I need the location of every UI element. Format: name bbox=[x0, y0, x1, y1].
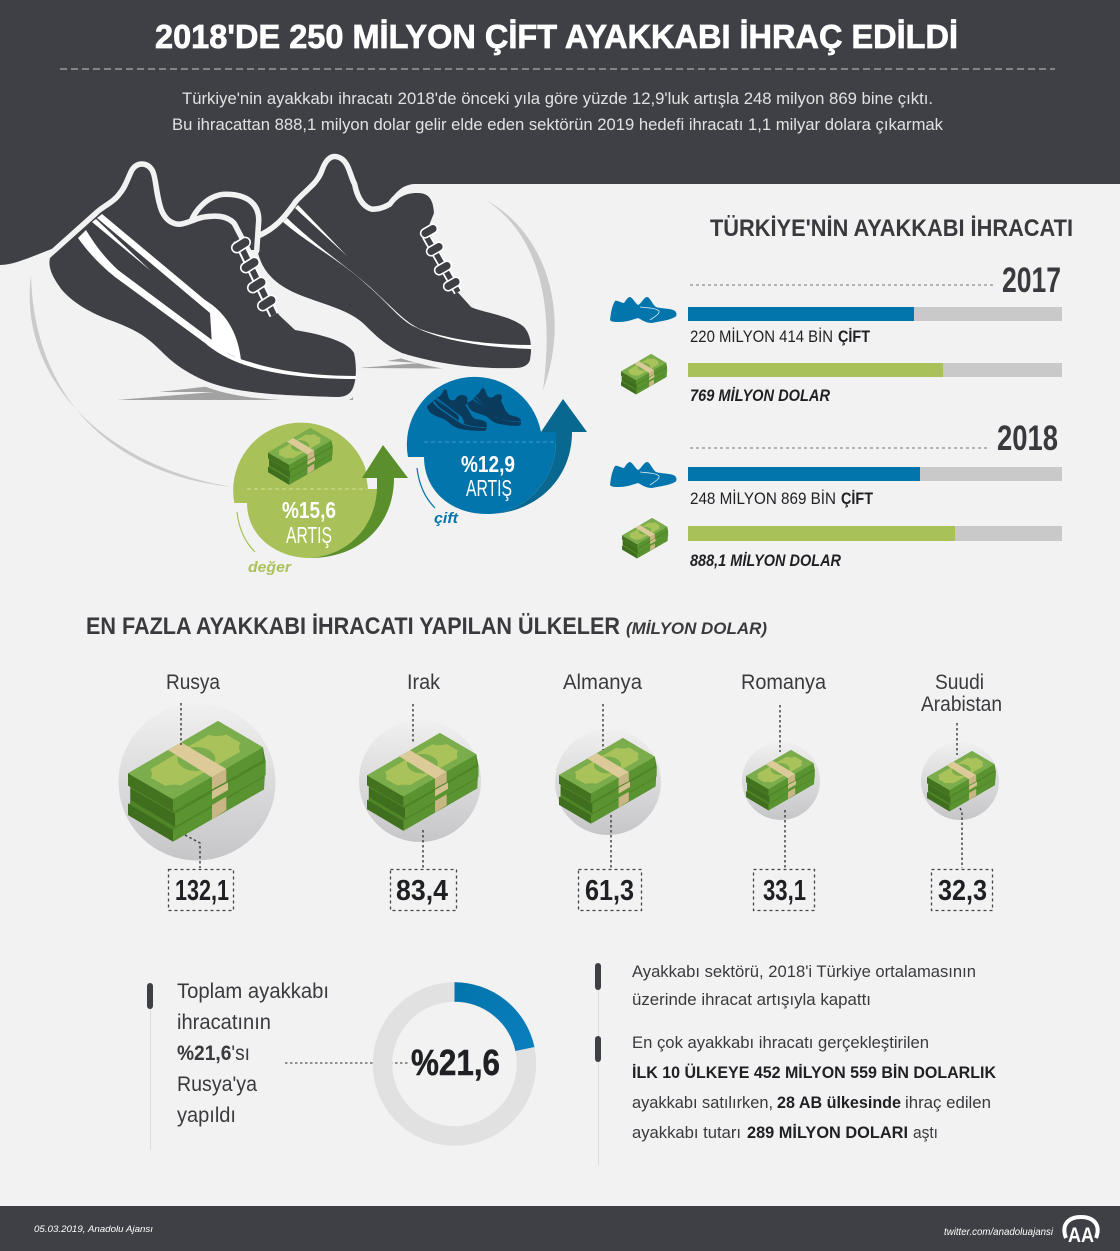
icon: money 2017 bbox=[621, 354, 667, 394]
label: ARTIŞ bbox=[466, 475, 512, 501]
swoosh: right grey arc bbox=[486, 200, 555, 390]
country: Suudi Arabistan: Suudi bbox=[935, 671, 984, 694]
country: Irak bbox=[359, 671, 481, 910]
blue disc bbox=[407, 377, 556, 514]
note: top ten bbox=[632, 1033, 997, 1142]
note: top ten: En çok ayakkabı ihracatı gerçekleştirilen bbox=[632, 1033, 929, 1052]
country: Rusya: Rusya bbox=[166, 671, 220, 694]
country: Romanya: 33,1 bbox=[763, 875, 806, 907]
heading: exports: TÜRKİYE'NİN AYAKKABI İHRACATI bbox=[710, 215, 1073, 242]
bar: value 2017 bbox=[688, 363, 1062, 377]
badge: value increase bbox=[233, 423, 408, 558]
percent: %15,6 bbox=[282, 497, 336, 523]
country: Rusya bbox=[118, 671, 276, 910]
money icon bbox=[268, 428, 333, 485]
caption arc: çift bbox=[417, 468, 435, 508]
value: pairs 2018: ÇİFT bbox=[841, 490, 873, 508]
note: top ten: 28 AB ülkesinde bbox=[777, 1093, 901, 1112]
footer date: 05.03.2019, Anadolu Ajansı bbox=[34, 1224, 153, 1235]
header dark band bbox=[0, 0, 1120, 265]
badge: pair increase bbox=[407, 377, 587, 514]
subtitle bbox=[172, 89, 943, 134]
note: sector: üzerinde ihracat artışıyla kapattı bbox=[632, 990, 871, 1009]
subtitle: Bu ihracattan 888,1 milyon dolar gelir elde eden sektörün 2019 hedefi ihracatı 1,1 milyar dolara çıkarmak bbox=[172, 115, 943, 134]
footer band bbox=[0, 1206, 1120, 1251]
country: Almanya: 61,3 bbox=[585, 875, 634, 907]
heading: top countries: (MİLYON DOLAR) bbox=[626, 619, 767, 638]
text: Russia share bbox=[177, 980, 329, 1127]
country: Almanya: Almanya bbox=[563, 671, 642, 694]
value: pairs 2017: 220 MİLYON 414 BİN bbox=[690, 327, 833, 346]
country: Suudi Arabistan: 32,3 bbox=[938, 875, 987, 907]
note: top ten: İLK 10 ÜLKEYE 452 MİLYON 559 BİN DOLARLIK bbox=[632, 1063, 997, 1082]
donut chart: %21,6 bbox=[411, 1042, 500, 1083]
note: top ten: aştı bbox=[913, 1123, 938, 1142]
value: dollars 2018: 888,1 MİLYON DOLAR bbox=[690, 552, 841, 570]
donut chart bbox=[382, 992, 526, 1136]
country: Suudi Arabistan: Arabistan bbox=[921, 693, 1002, 716]
text: Russia share: Rusya'ya bbox=[177, 1073, 257, 1096]
dark blue arrow bbox=[487, 399, 587, 514]
text: Russia share: Toplam ayakkabı bbox=[177, 980, 329, 1003]
caption arc: değer bbox=[237, 512, 255, 552]
bar: pairs 2018 bbox=[688, 467, 1062, 481]
marker: Russia share bbox=[147, 983, 153, 1150]
note: top ten: ihraç edilen bbox=[905, 1093, 991, 1112]
bar: pairs 2017 bbox=[688, 307, 1062, 321]
icon: blue shoes 2018 bbox=[610, 462, 676, 488]
subtitle: Türkiye'nin ayakkabı ihracatı 2018'de önceki yıla göre yüzde 12,9'luk artışla 248 milyon 869 bine çıktı. bbox=[182, 89, 933, 108]
value: pairs 2017: ÇİFT bbox=[838, 328, 870, 346]
motion shadow: right shoe bbox=[358, 355, 530, 369]
country: Romanya: Romanya bbox=[741, 671, 826, 694]
note: top ten: 289 MİLYON DOLARI bbox=[747, 1123, 908, 1142]
note: top ten: ayakkabı satılırken, bbox=[632, 1093, 773, 1112]
markers: notes bbox=[595, 963, 601, 1165]
text: Russia share: ihracatının bbox=[177, 1011, 271, 1034]
dark green arrow bbox=[310, 445, 408, 558]
logo: Anadolu Ajansı: AA bbox=[1068, 1224, 1094, 1247]
footer social handle: twitter.com/anadoluajansi bbox=[944, 1227, 1054, 1238]
caption: çift: çift bbox=[434, 510, 459, 527]
icon: money 2018 bbox=[622, 518, 668, 558]
small shoes icon bbox=[427, 388, 521, 431]
country: Suudi Arabistan bbox=[921, 671, 1002, 910]
logo: Anadolu Ajansı bbox=[1064, 1217, 1098, 1247]
heading: top countries: EN FAZLA AYAKKABI İHRACATI YAPILAN ÜLKELER bbox=[86, 613, 620, 640]
year 2018: 2018 bbox=[997, 419, 1058, 458]
swoosh: left grey arc bbox=[30, 275, 232, 487]
value: dollars 2017: 769 MİLYON DOLAR bbox=[690, 387, 830, 405]
value: pairs 2018: 248 MİLYON 869 BİN bbox=[690, 489, 836, 508]
label: ARTIŞ bbox=[286, 522, 332, 548]
bar: value 2018 bbox=[688, 526, 1062, 541]
green disc bbox=[233, 423, 377, 558]
country: Irak: Irak bbox=[407, 671, 440, 694]
text: Russia share: yapıldı bbox=[177, 1104, 236, 1127]
motion shadow: left shoe bbox=[117, 383, 354, 400]
country: Romanya bbox=[741, 671, 826, 910]
percent: %12,9 bbox=[461, 451, 515, 477]
caption: değer: değer bbox=[248, 559, 292, 576]
note: sector: Ayakkabı sektörü, 2018'i Türkiye ortalamasının bbox=[632, 962, 976, 981]
note: sector bbox=[632, 962, 976, 1009]
text: Russia share: %21,6'sı bbox=[177, 1042, 250, 1065]
title: 2018'DE 250 MİLYON ÇİFT AYAKKABI İHRAÇ EDİLDİ bbox=[155, 18, 958, 55]
country: Rusya: 132,1 bbox=[175, 875, 229, 907]
note: top ten: ayakkabı tutarı bbox=[632, 1123, 741, 1142]
country: Almanya bbox=[555, 671, 661, 910]
icon: blue shoes 2017 bbox=[610, 297, 676, 323]
left shoe bbox=[49, 167, 356, 397]
right shoe bbox=[256, 159, 531, 368]
country: Irak: 83,4 bbox=[396, 875, 448, 907]
year 2017: 2017 bbox=[1002, 261, 1061, 300]
